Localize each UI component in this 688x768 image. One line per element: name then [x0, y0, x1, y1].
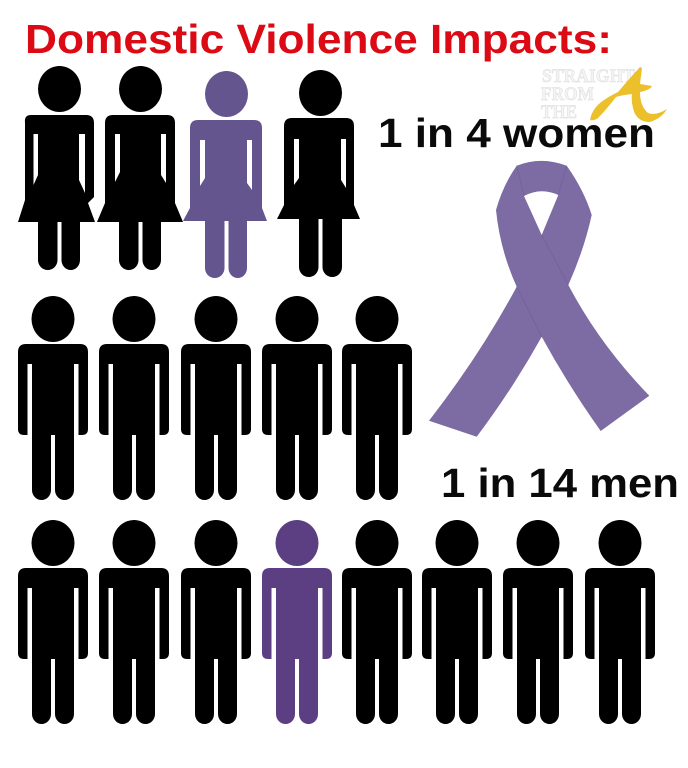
watermark: Straight From The A	[541, 66, 667, 123]
watermark: Straight From The A: FROM	[541, 84, 594, 105]
icon: woman 1	[18, 66, 95, 270]
icon: woman 4	[277, 70, 360, 277]
row of men: bottom row with one purple	[18, 520, 655, 724]
icon: woman 2	[97, 66, 183, 270]
icon: purple awareness ribbon	[429, 161, 649, 437]
title: Domestic Violence Impacts:	[25, 16, 612, 62]
text: 1 in 14 men: 1 in 14 men	[441, 460, 679, 506]
watermark: Straight From The A: STRAIGHT	[542, 66, 635, 87]
watermark: Straight From The A: THE	[541, 102, 577, 123]
text: 1 in 4 women: 1 in 4 women	[378, 110, 655, 156]
icon: woman 3 purple	[183, 71, 267, 278]
row of men: middle row	[18, 296, 412, 500]
